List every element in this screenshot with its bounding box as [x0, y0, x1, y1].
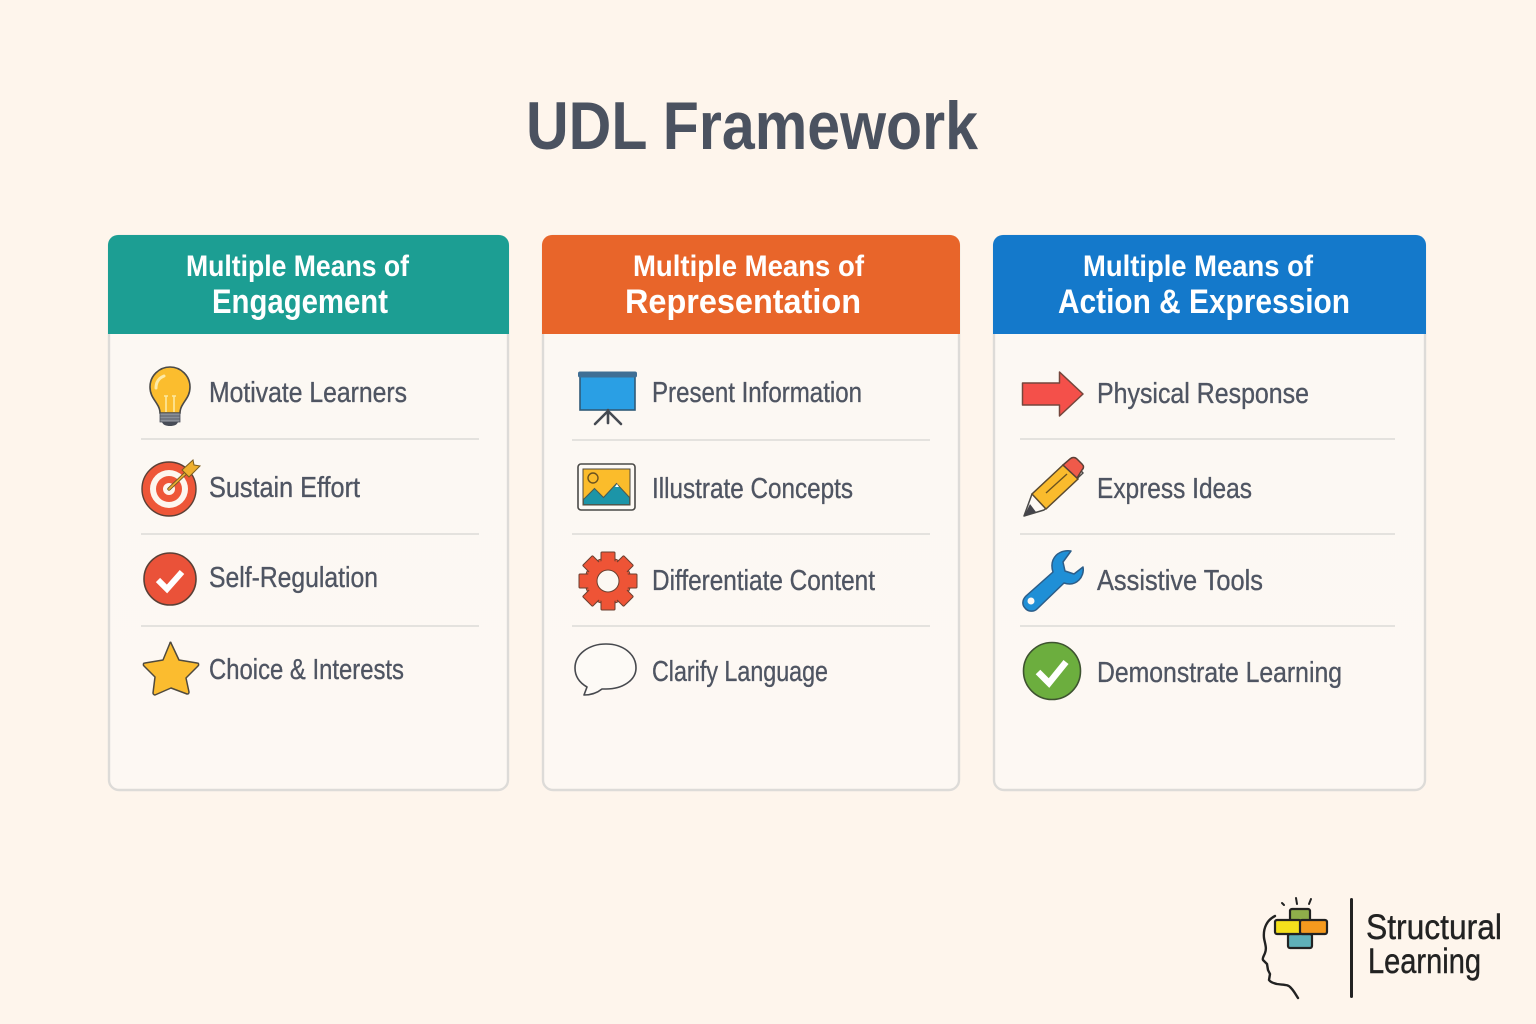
- header: action and expression: [993, 235, 1426, 334]
- label: Self-Regulation: Self-Regulation: [209, 562, 378, 594]
- header: action and expression: Multiple Means of: [1083, 250, 1314, 283]
- label: Illustrate Concepts: Illustrate Concepts: [652, 473, 853, 505]
- icon: red check circle: [144, 553, 196, 605]
- header: action and expression: Action & Expression: [1058, 283, 1350, 321]
- title: UDL Framework: [526, 88, 978, 164]
- icon: green check circle: [1024, 642, 1080, 700]
- panel: representation: [542, 235, 960, 790]
- divider: [1350, 898, 1353, 998]
- wordmark: [1366, 908, 1502, 981]
- icon: head with blocks: [1263, 898, 1327, 998]
- logo: Structural Learning: [1263, 898, 1502, 998]
- header: engagement: [108, 235, 509, 334]
- label: Motivate Learners: Motivate Learners: [209, 377, 407, 409]
- label: Demonstrate Learning: Demonstrate Learning: [1097, 657, 1342, 689]
- wordmark: Learning: [1368, 942, 1481, 981]
- icon: projector screen: [578, 372, 637, 424]
- icon: target with dart: [142, 460, 200, 516]
- icon: wrench: [1023, 551, 1083, 611]
- panel: engagement: [108, 235, 509, 790]
- icon: star: [143, 642, 199, 695]
- panel: action and expression: [993, 235, 1426, 790]
- icon: light bulb: [150, 367, 190, 426]
- label: Sustain Effort: Sustain Effort: [209, 472, 360, 504]
- panel body: representation: [543, 236, 959, 790]
- label: Present Information: Present Information: [652, 377, 862, 409]
- icon: pencil: [1024, 458, 1084, 516]
- icon: speech bubble: [575, 644, 636, 695]
- header: representation: Representation: [625, 283, 861, 321]
- label: Assistive Tools: Assistive Tools: [1097, 565, 1263, 597]
- label: Physical Response: Physical Response: [1097, 378, 1309, 410]
- panel body: engagement: [109, 236, 508, 790]
- header: representation: Multiple Means of: [633, 250, 865, 283]
- label: Choice & Interests: Choice & Interests: [209, 654, 404, 686]
- icon: picture frame: [578, 464, 635, 510]
- label: Clarify Language: Clarify Language: [652, 656, 828, 688]
- header: engagement: Multiple Means of: [186, 250, 410, 283]
- icon: red arrow: [1022, 372, 1083, 416]
- header: representation: [542, 235, 960, 334]
- label: Differentiate Content: Differentiate Content: [652, 565, 875, 597]
- panel body: action and expression: [994, 236, 1425, 790]
- label: Express Ideas: Express Ideas: [1097, 473, 1252, 505]
- icon: gear: [579, 552, 637, 610]
- header: engagement: Engagement: [212, 283, 388, 321]
- wordmark: Structural: [1366, 908, 1502, 947]
